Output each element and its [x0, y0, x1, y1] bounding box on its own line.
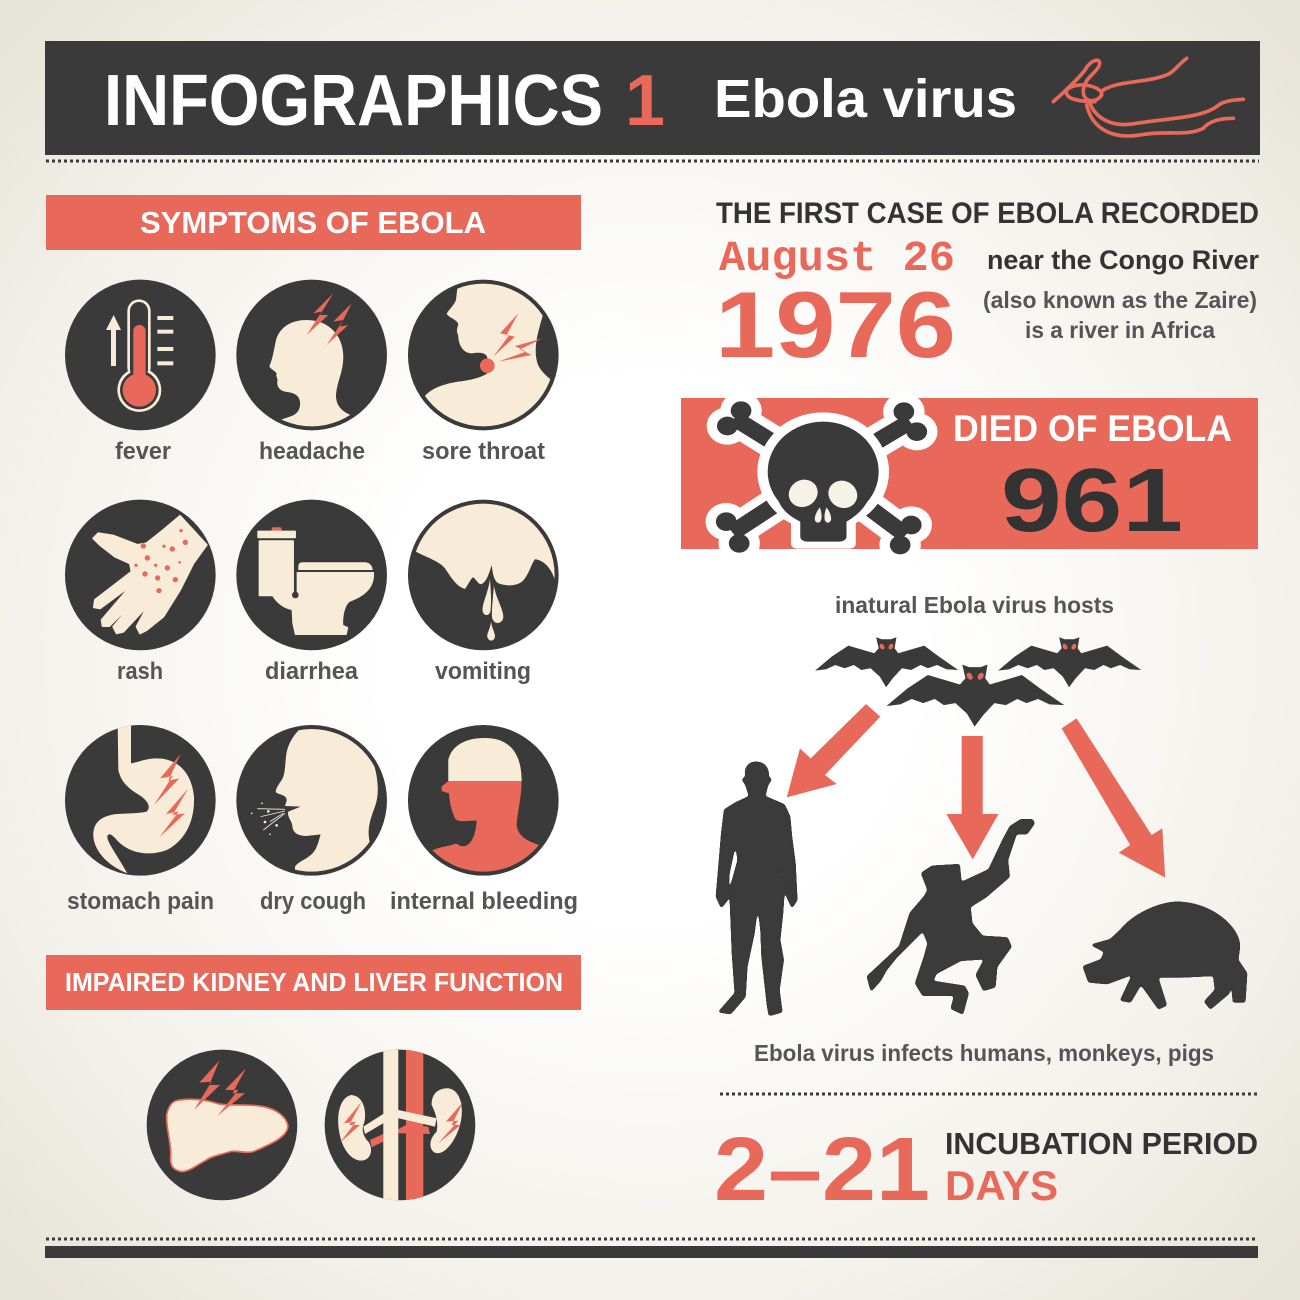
- icon: monkey silhouette: [868, 820, 1034, 1013]
- label: stomach pain: stomach pain: [67, 888, 214, 915]
- arrow: bats to monkey: [946, 736, 998, 859]
- location note: (also known as the Zaire): [983, 287, 1257, 313]
- incubation period: [714, 1120, 1258, 1220]
- icon: stomach pain: [65, 723, 216, 876]
- icon: left bat: [815, 637, 958, 687]
- icon: kidneys: [325, 1050, 475, 1203]
- date: August 26: August 26: [719, 234, 955, 283]
- title number: 1: [625, 61, 665, 141]
- unit: days: DAYS: [945, 1162, 1058, 1209]
- label: diarrhea: diarrhea: [265, 658, 359, 685]
- panel: died of ebola: [681, 392, 1258, 564]
- icon: sore throat: [408, 280, 560, 437]
- icon: internal bleeding: [408, 725, 559, 877]
- heading: first case recorded: THE FIRST CASE OF EBOLA RECORDED: [716, 197, 1259, 230]
- icon: human silhouette: [717, 763, 796, 1015]
- icon: ebola virus filament: [1053, 58, 1243, 136]
- icon: pig silhouette: [1084, 903, 1246, 1008]
- label: vomiting: vomiting: [435, 658, 531, 685]
- label: fever: fever: [115, 438, 171, 465]
- icon: diarrhea: [236, 500, 387, 650]
- label: headache: headache: [259, 438, 365, 465]
- icon: liver: [147, 1050, 297, 1200]
- heading: symptoms of ebola: [46, 195, 581, 250]
- header bar: [45, 41, 1260, 155]
- label: internal bleeding: internal bleeding: [390, 888, 578, 915]
- caption: virus infects: Ebola virus infects humans, monkeys, pigs: [754, 1040, 1214, 1066]
- number: 961: 961: [1001, 451, 1183, 551]
- label: dry cough: dry cough: [260, 888, 366, 915]
- heading: incubation period: INCUBATION PERIOD: [945, 1126, 1258, 1161]
- icon: center bat: [887, 665, 1064, 727]
- text block: first case: [715, 197, 1259, 377]
- heading: impaired kidney and liver function: [46, 955, 581, 1010]
- year: 1976: 1976: [715, 272, 956, 377]
- heading: impaired kidney and liver function: IMPAIRED KIDNEY AND LIVER FUNCTION: [65, 967, 563, 997]
- location note: is a river in Africa: [1025, 317, 1215, 343]
- title: INFOGRAPHICS: [104, 61, 603, 141]
- bottom bar: [45, 1246, 1258, 1258]
- number: 2-21: 2–21: [714, 1120, 930, 1220]
- icon: headache: [236, 280, 387, 437]
- location note: [983, 287, 1257, 343]
- icon: vomiting: [408, 500, 559, 650]
- arrow: bats to human: [787, 704, 880, 797]
- icon: rash: [65, 500, 216, 650]
- icon: dry cough: [236, 723, 387, 880]
- heading: symptoms of ebola: SYMPTOMS OF EBOLA: [140, 205, 486, 240]
- location: near the Congo River: [987, 245, 1259, 275]
- heading: died of ebola: DIED OF EBOLA: [953, 408, 1232, 449]
- label: rash: rash: [117, 658, 163, 685]
- icon: right bat: [998, 637, 1141, 687]
- icon: skull and crossbones: [706, 392, 938, 564]
- arrow: bats to pig: [1062, 718, 1165, 878]
- caption: natural hosts: inatural Ebola virus hosts: [835, 592, 1114, 618]
- label: sore throat: sore throat: [422, 438, 545, 465]
- icon: fever: [65, 280, 216, 430]
- subtitle: Ebola virus: [714, 69, 1017, 129]
